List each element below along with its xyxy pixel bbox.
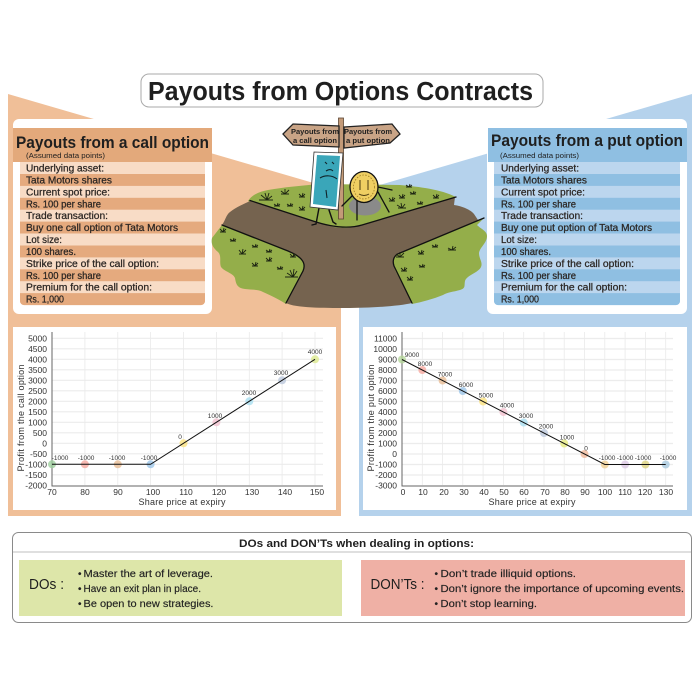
put chart grid [402,332,673,486]
call chart data labels: -1000 [52,455,69,462]
put chart y axis labels: -2000 [375,470,397,480]
call chart x axis labels: 100 [146,487,160,497]
put chart y axis labels [373,334,397,490]
panel: call option chart [13,327,336,510]
signpost [283,118,400,219]
put chart x axis labels: 20 [439,487,449,497]
call chart data labels: 4000 [308,349,323,356]
call chart y axis labels: 500 [33,428,47,438]
DON'Ts box: DON’Ts : [370,576,424,593]
put option heading: Payouts from a put option [491,131,683,150]
call option rows: Rs. 100 per share [26,199,101,210]
signpost: Payouts from [291,127,339,136]
call chart y axis labels: 5000 [28,333,47,343]
call option heading [13,128,212,162]
call chart axis titles: Profit from the call option [16,364,26,472]
panel: put option chart [363,327,687,510]
put chart x axis labels: 10 [418,487,428,497]
put chart x axis labels: 40 [479,487,489,497]
put option rows: Premium for the call option: [501,283,627,294]
put chart markers [398,356,670,468]
put option heading [488,128,687,162]
put chart data labels [405,352,677,462]
call chart x axis labels: 70 [47,487,57,497]
background panel: put option [359,94,692,516]
put chart data labels: -1000 [617,455,634,462]
put chart data labels: -1000 [599,455,616,462]
call chart data labels: -1000 [109,455,126,462]
road edges [222,197,484,303]
put chart y axis labels: 6000 [378,386,397,396]
call option rows: Trade transaction: [26,211,108,222]
call option rows: Current spot price: [26,187,110,198]
put option rows: Underlying asset: [501,164,579,174]
DOs box: • [78,584,82,595]
call chart x axis labels: 140 [278,487,292,497]
call chart y axis labels: 1500 [28,407,47,417]
call option rows: Buy one call option of Tata Motors [26,223,178,234]
panel: call option data points [13,119,212,314]
icon: rock [349,196,381,216]
call chart data labels: 1000 [208,413,223,420]
put chart data labels: 6000 [459,382,474,389]
call chart y axis labels [25,333,47,490]
call option rows: Lot size: [26,235,62,246]
background panel: call option [8,94,341,516]
panel: DOs and DON'Ts [12,532,692,622]
call chart y axis labels: 3500 [28,365,47,375]
call chart x axis labels: 150 [310,487,324,497]
call chart y axis labels: 0 [42,438,47,448]
call chart markers [48,355,319,468]
call chart y axis labels: 2500 [28,386,47,396]
call chart payoff line [52,359,315,464]
call option rows: 100 shares. [26,247,76,258]
put chart x axis labels: 120 [638,487,652,497]
put chart x axis labels: 70 [540,487,550,497]
call chart data labels: -1000 [141,455,158,462]
put chart y axis labels: 7000 [378,376,397,386]
put option rows: Current spot price: [501,187,585,198]
call chart axis titles [16,364,226,507]
call option rows [20,162,205,306]
put chart y axis labels: 9000 [378,354,397,364]
DOs box: • [78,569,82,580]
put chart data labels: 4000 [500,402,515,410]
DOs box: Be open to new strategies. [84,599,214,610]
DOs box: • [78,599,82,610]
icon: coin character [342,172,392,220]
call chart y axis labels: -500 [30,449,47,459]
signpost: Payouts from [344,127,392,136]
call chart x axis labels: 80 [80,487,90,497]
put chart y axis labels: 2000 [378,428,397,438]
put option rows: Tata Motors shares [501,176,587,186]
put chart y axis labels: 4000 [378,407,397,417]
call chart data labels: 3000 [274,370,289,377]
put chart axis titles: Share price at expiry [488,497,576,507]
call chart x axis labels: 110 [179,487,193,497]
put chart y axis labels: 8000 [378,365,397,375]
put chart y axis labels: 10000 [373,344,397,354]
put chart y axis labels: 5000 [378,396,397,406]
put chart x axis labels: 110 [618,487,632,497]
DON'Ts box: • [434,584,438,595]
call chart y axis labels: 4500 [28,344,47,354]
icon: banknote character [310,152,343,225]
put option rows: Rs. 100 per share [501,271,576,282]
put chart x axis labels: 50 [499,487,509,497]
DON'Ts box: Don’t trade illiquid options. [440,569,576,580]
DON'Ts box: • [434,569,438,580]
grass tufts [220,184,456,280]
call chart y axis labels: 2000 [28,396,47,406]
call chart axis titles: Share price at expiry [138,497,226,507]
put chart y axis labels: 11000 [374,334,397,344]
put chart axis titles: Profit from the put option [366,364,376,472]
put chart data labels: 3000 [519,413,534,420]
put chart payoff line [402,360,666,464]
call chart data labels [52,349,323,462]
call chart data labels: 2000 [242,390,257,397]
put chart data labels: 5000 [479,392,494,400]
put option rows: 100 shares. [501,247,551,258]
call chart data labels: 0 [178,434,182,441]
call chart y axis labels: -1000 [25,459,47,469]
road [222,197,484,308]
DON'Ts box: Don’t ignore the importance of upcoming events. [440,584,684,595]
DOs and DON'Ts heading: DOs and DON’Ts when dealing in options: [239,538,474,550]
put chart y axis labels: 0 [392,449,397,459]
put chart data labels: 8000 [418,361,433,368]
put chart data labels: -1000 [635,455,652,462]
signpost: a put option [346,136,391,145]
DON'Ts box: Don’t stop learning. [440,599,537,610]
put chart x axis labels: 30 [459,487,469,497]
DOs box: Have an exit plan in place. [84,584,201,595]
put chart data labels: 0 [584,446,588,452]
put option rows: Buy one put option of Tata Motors [501,223,652,234]
call chart grid [52,332,323,486]
call option heading: Payouts from a call option [16,133,209,152]
call option rows: Premium for the call option: [26,283,152,294]
call option rows: Rs. 100 per share [26,271,101,282]
panel: put option data points [487,119,687,314]
call option rows: Underlying asset: [26,164,104,174]
illustration: crossroads [212,118,487,308]
put option rows: Trade transaction: [501,211,583,222]
put chart x axis labels: 130 [659,487,673,497]
call chart data labels: -1000 [78,455,95,462]
call chart y axis labels: -1500 [25,470,47,480]
put chart data labels: 7000 [438,372,453,378]
put chart x axis labels: 80 [560,487,570,497]
call option rows: Strike price of the call option: [26,259,159,270]
DOs box: DOs : [29,576,64,593]
put chart x axis labels: 100 [598,487,612,497]
put chart x axis labels: 60 [519,487,529,497]
put option heading: (Assumed data points) [500,151,580,160]
call chart y axis labels: -2000 [25,480,47,490]
title: Payouts from Options Contracts [148,78,533,106]
call option heading: (Assumed data points) [26,151,106,160]
put option rows: Rs. 1,000 [501,295,539,306]
put chart data labels: 1000 [560,434,575,442]
put option rows: Strike price of the call option: [501,259,634,270]
put chart data labels: 2000 [539,424,554,430]
signpost: a call option [293,136,337,145]
put chart x axis labels: 90 [580,487,590,497]
put chart x axis labels [401,487,673,497]
put chart y axis labels: -1000 [375,460,397,470]
call option rows: Tata Motors shares [26,176,112,186]
call chart x axis labels: 90 [113,487,123,497]
call chart x axis labels: 130 [245,487,259,497]
put option rows: Lot size: [501,235,537,246]
DOs box [19,560,342,616]
call chart x axis labels [47,487,324,497]
put chart y axis labels: 1000 [378,438,397,448]
put chart x axis labels: 0 [401,487,406,497]
DON'Ts box [361,560,685,616]
grass [212,184,487,304]
put chart y axis labels: 3000 [378,418,397,428]
call chart y axis labels: 4000 [28,354,47,364]
put option rows [494,162,680,306]
put option rows: Rs. 100 per share [501,199,576,210]
call chart y axis labels: 1000 [28,417,47,427]
call option rows: Rs. 1,000 [26,295,64,306]
put chart y axis labels: -3000 [375,480,397,490]
put chart data labels: 9000 [405,352,420,359]
call chart x axis labels: 120 [212,487,226,497]
DON'Ts box: • [434,599,438,610]
call chart y axis labels: 3000 [28,375,47,385]
put chart data labels: -1000 [660,455,677,462]
put chart axis titles [366,364,576,507]
DOs box: Master the art of leverage. [84,569,213,580]
